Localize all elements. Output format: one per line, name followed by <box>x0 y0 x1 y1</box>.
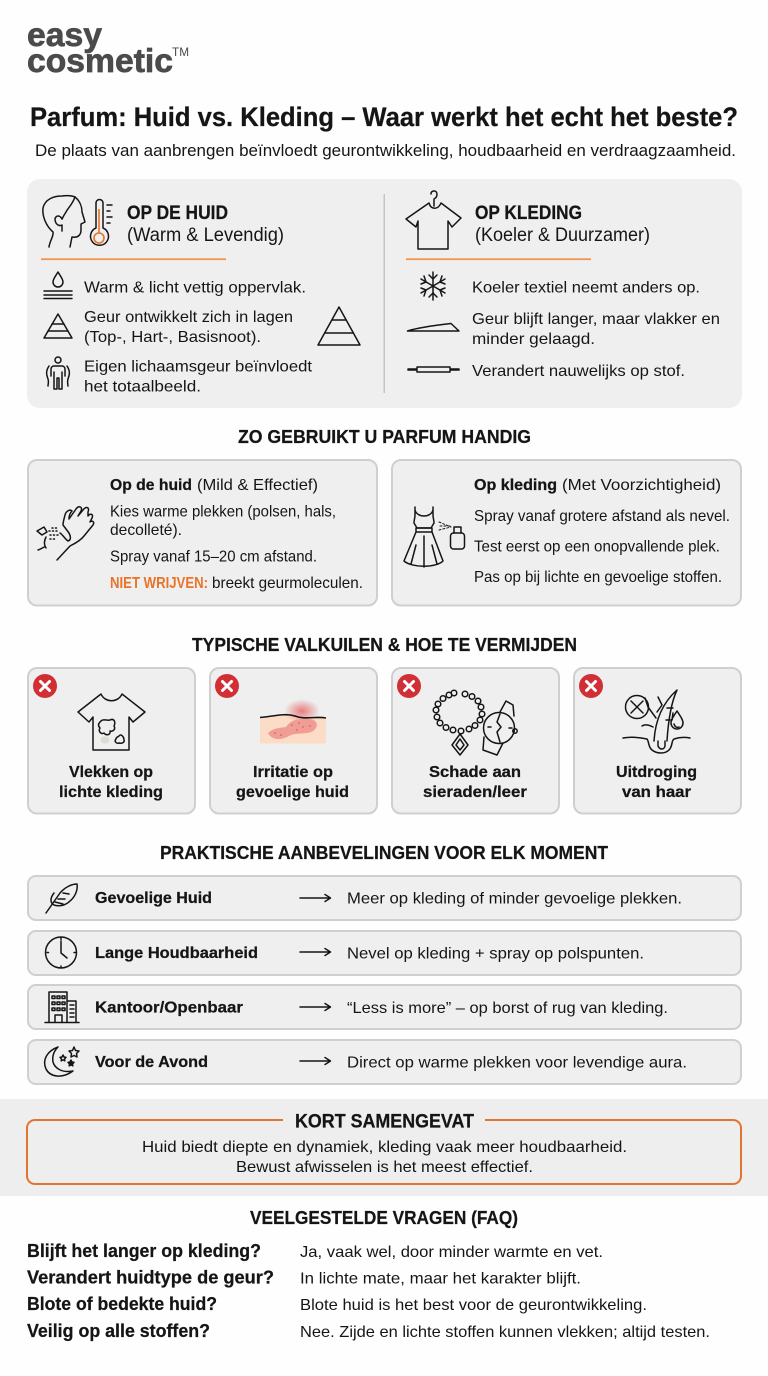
text: irritation label: Irritatie op <box>253 764 333 781</box>
icon: small pyramid <box>44 314 72 338</box>
text: skin use heading: Op de huid <box>110 477 192 494</box>
row: long lasting <box>28 931 741 975</box>
logo <box>27 16 189 79</box>
icon: irritated skin <box>260 699 326 744</box>
heading: how to use: ZO GEBRUIKT U PARFUM HANDIG <box>238 427 531 447</box>
heading: faq: VEELGESTELDE VRAGEN (FAQ) <box>250 1208 518 1228</box>
icon: red cross badge <box>397 674 421 698</box>
text: warm spots <box>110 504 336 539</box>
text: jewellery label: Schade aan <box>429 764 521 781</box>
heading: recommendations: PRAKTISCHE AANBEVELINGEN VOOR ELK MOMENT <box>160 843 608 863</box>
row: evening <box>28 1040 741 1084</box>
text: summary body <box>142 1139 627 1176</box>
faq item 4: Nee. Zijde en lichte stoffen kunnen vlekken; altijd testen. <box>300 1324 710 1341</box>
icon: red cross badge <box>33 674 57 698</box>
faq item 1 <box>27 1241 603 1261</box>
text: body scent: het totaalbeeld. <box>84 378 201 396</box>
faq item 2: Verandert huidtype de geur? <box>27 1268 274 1288</box>
text: stains label: lichte kleding <box>59 784 163 801</box>
faq item 4 <box>27 1321 710 1341</box>
text: body scent <box>84 358 313 396</box>
icon: hand with spray <box>37 507 94 560</box>
text: evening advice: Direct op warme plekken voor levendige aura. <box>347 1054 687 1072</box>
icon: red cross badge <box>579 674 603 698</box>
arrow <box>300 948 330 956</box>
faq list <box>27 1241 710 1341</box>
arrow <box>300 1004 330 1010</box>
text: hair label <box>616 764 697 801</box>
faq item 3 <box>27 1294 647 1314</box>
text: clothing use heading <box>474 477 721 494</box>
text: do not rub: breekt geurmoleculen. <box>212 575 363 592</box>
faq item 1: Blijft het langer op kleding? <box>27 1241 261 1261</box>
text: scent layers: (Top-, Hart-, Basisnoot). <box>84 329 261 346</box>
icon: clock <box>46 937 76 968</box>
text: long lasting label: Lange Houdbaarheid <box>95 945 258 962</box>
icon: flat wedge <box>408 324 459 331</box>
text: summary body: Bewust afwisselen is het meest effectief. <box>236 1159 533 1176</box>
text: scent stays longer: minder gelaagd. <box>472 331 595 348</box>
heading: op kleding <box>475 203 650 246</box>
row: sensitive skin <box>28 876 741 920</box>
subtitle: De plaats van aanbrengen beïnvloedt geurontwikkeling, houdbaarheid en verdraagzaamheid. <box>35 141 736 160</box>
text: irritation label <box>236 764 349 801</box>
text: sensitive skin advice: Meer op kleding of minder gevoelige plekken. <box>347 890 682 908</box>
card: stains <box>28 668 195 814</box>
text: stains label <box>59 764 163 801</box>
text: scent layers <box>84 309 293 346</box>
heading: op kleding: OP KLEDING <box>475 203 582 224</box>
heading: pitfalls: TYPISCHE VALKUILEN & HOE TE VERMIJDEN <box>192 635 577 655</box>
text: barely changes: Verandert nauwelijks op stof. <box>472 363 685 380</box>
text: hair label: Uitdroging <box>616 764 697 781</box>
card: hair dehydration <box>574 668 741 814</box>
faq item 2 <box>27 1268 581 1288</box>
text: summary body: Huid biedt diepte en dynamiek, kleding vaak meer houdbaarheid. <box>142 1139 627 1156</box>
faq item 3: Blote of bedekte huid? <box>27 1294 217 1314</box>
row: office <box>28 985 741 1029</box>
text: jewellery label: sieraden/leer <box>423 784 527 801</box>
faq item 1: Ja, vaak wel, door minder warmte en vet. <box>300 1244 603 1261</box>
icon: dry hair follicle <box>623 690 690 753</box>
text: scent stays longer <box>472 311 720 348</box>
text: body scent: Eigen lichaamsgeur beïnvloedt <box>84 358 313 376</box>
text: stains label: Vlekken op <box>69 764 153 781</box>
text: spray as mist: Spray vanaf grotere afstand als nevel. <box>474 508 730 525</box>
text: office label: Kantoor/Openbaar <box>95 1000 243 1016</box>
text: warm spots: Kies warme plekken (polsen, hals, <box>110 504 336 520</box>
text: delicate fabrics: Pas op bij lichte en gevoelige stoffen. <box>474 569 722 586</box>
text: scent layers: Geur ontwikkelt zich in lagen <box>84 309 293 326</box>
text: do not rub <box>110 575 363 592</box>
title: Parfum: Huid vs. Kleding – Waar werkt het echt het beste? <box>30 102 738 132</box>
icon: large pyramid <box>318 307 360 345</box>
icon: oil drop on surface <box>44 272 72 298</box>
card: skin irritation <box>210 668 377 814</box>
text: test first: Test eerst op een onopvallende plek. <box>474 538 720 556</box>
panel: use on skin <box>28 460 377 606</box>
heading: op kleding: (Koeler & Duurzamer) <box>475 225 650 246</box>
text: clothing use heading: Op kleding <box>474 477 557 494</box>
faq item 3: Blote huid is het best voor de geurontwikkeling. <box>300 1297 647 1314</box>
panel: summary <box>0 1099 768 1196</box>
text: clothing use heading: (Met Voorzichtigheid) <box>562 477 721 494</box>
text: sensitive skin label: Gevoelige Huid <box>95 890 212 907</box>
icon: necklace and cracked watch <box>433 690 517 755</box>
logo: easy <box>27 16 103 53</box>
text: skin use heading: (Mild & Effectief) <box>197 477 318 494</box>
card: jewellery damage <box>392 668 559 814</box>
panel: comparison skin vs clothing <box>27 179 742 408</box>
icon: head profile <box>43 196 85 247</box>
text: irritation label: gevoelige huid <box>236 784 349 801</box>
icon: red cross badge <box>215 674 239 698</box>
heading: op de huid: OP DE HUID <box>127 203 228 224</box>
icon: moon and stars <box>45 1047 79 1076</box>
text: spray distance: Spray vanaf 15–20 cm afstand. <box>110 548 317 566</box>
text: scent stays longer: Geur blijft langer, maar vlakker en <box>472 311 720 328</box>
text: jewellery label <box>423 764 527 801</box>
icon: feather <box>46 884 77 913</box>
heading: op de huid <box>127 203 284 246</box>
logo: TM <box>172 45 189 59</box>
icon: stained t-shirt <box>78 694 145 750</box>
icon: office building <box>45 992 79 1022</box>
faq item 2: In lichte mate, maar het karakter blijft. <box>300 1270 581 1288</box>
heading: op de huid: (Warm & Levendig) <box>127 225 284 246</box>
arrow <box>300 1058 330 1064</box>
text: evening label: Voor de Avond <box>95 1054 208 1071</box>
panel: use on clothing <box>392 460 741 606</box>
arrow <box>300 894 330 902</box>
icon: t-shirt on hanger <box>406 191 461 249</box>
text: skin use heading <box>110 477 318 494</box>
text: warm spots: decolleté). <box>110 522 182 539</box>
text: long lasting advice: Nevel op kleding + spray op polspunten. <box>347 946 644 962</box>
text: do not rub: NIET WRIJVEN: <box>110 575 208 592</box>
icon: snowflake <box>421 272 445 300</box>
icon: thermometer <box>90 200 112 245</box>
text: office advice: “Less is more” – op borst of rug van kleding. <box>347 1000 668 1017</box>
icon: person with scent aura <box>47 357 69 389</box>
logo: cosmetic <box>27 42 173 79</box>
text: hair label: van haar <box>622 784 691 801</box>
text: cooler textile: Koeler textiel neemt anders op. <box>472 280 700 296</box>
text: warm surface: Warm & licht vettig oppervlak. <box>84 280 306 296</box>
faq item 4: Veilig op alle stoffen? <box>27 1321 210 1341</box>
heading: summary: KORT SAMENGEVAT <box>295 1112 474 1132</box>
icon: flat line <box>408 367 459 372</box>
icon: dress and perfume bottle <box>404 507 464 567</box>
